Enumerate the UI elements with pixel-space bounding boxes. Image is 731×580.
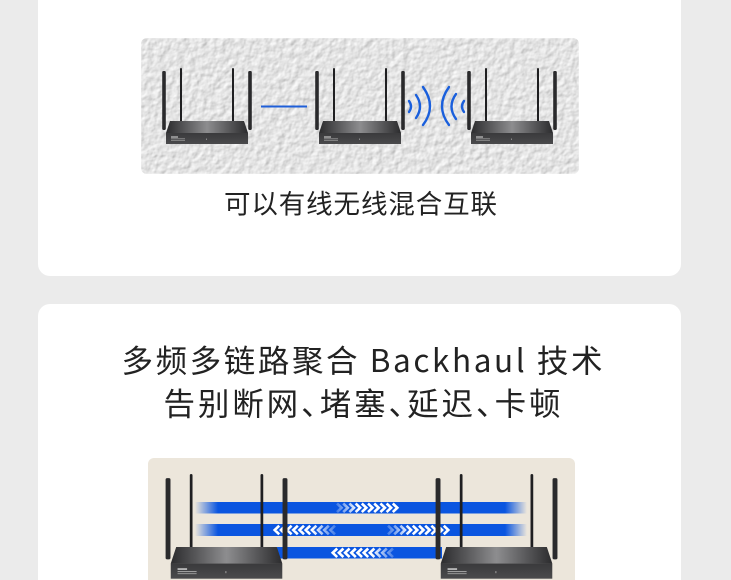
chart: top link bar <box>195 502 527 514</box>
image: silver textured backdrop <box>141 38 579 174</box>
icon: left router <box>166 474 287 579</box>
panel: backhaul card <box>38 304 681 580</box>
icon: wired link line <box>261 106 307 108</box>
icon: router one <box>162 68 252 144</box>
chart: bottom link bar <box>277 547 442 558</box>
icon: wireless signal waves <box>409 87 464 125</box>
subheading: no disconnects or congestion: 告别断网、堵塞、延迟、卡顿 <box>164 379 560 425</box>
icon: router two <box>315 68 405 144</box>
chart: middle link bar <box>195 524 527 536</box>
image: beige backdrop with backhaul links <box>148 458 575 580</box>
panel: mixed interconnect card <box>38 0 681 276</box>
icon: right router <box>436 474 557 579</box>
caption: mixed interconnect: 可以有线无线混合互联 <box>224 182 497 222</box>
icon: router three <box>467 68 557 144</box>
heading: backhaul technology: 多频多链路聚合 Backhaul 技术 <box>122 336 602 382</box>
